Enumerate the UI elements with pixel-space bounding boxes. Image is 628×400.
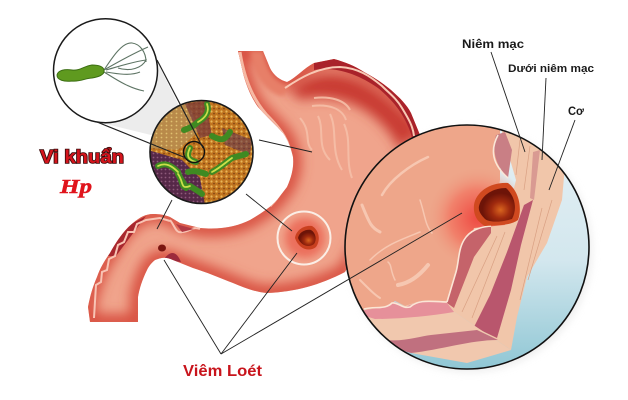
zoomed cross-section circle — [340, 120, 600, 375]
dark lesser curvature band — [267, 116, 282, 132]
esophagus inner tone — [250, 51, 290, 96]
stomach ulcer — [285, 218, 325, 258]
heading: Hp: Hp — [59, 176, 92, 198]
Dưới niêm mạc line — [542, 78, 546, 160]
inflammation glow — [437, 173, 514, 254]
pale tan tissue region — [151, 104, 200, 150]
circle fill and outline — [54, 19, 158, 123]
muscle band horizontal — [385, 330, 498, 353]
greater curvature dark rim — [314, 59, 420, 138]
stomach body — [88, 51, 420, 322]
white edge of mucosa — [447, 135, 508, 302]
duodenum serrated edge — [94, 218, 170, 318]
crater — [474, 183, 520, 226]
cone line upper — [157, 60, 203, 148]
micro view of bacteria in stomach lining — [148, 98, 256, 208]
Viêm Loét to big circle — [221, 213, 462, 354]
white highlight circle around stomach ulcer — [278, 212, 330, 264]
mauve mucosal cut upper — [494, 132, 512, 178]
muscle band vertical — [474, 200, 533, 338]
duodenum right edge fold — [140, 288, 141, 290]
greater curvature light fold — [285, 67, 414, 136]
upper duodenal fold — [170, 220, 200, 232]
duodenal ulcer — [158, 244, 166, 252]
micro circle to duodenum — [157, 200, 172, 229]
micro circle to ulcer — [246, 194, 292, 231]
purple streak upper — [185, 100, 212, 138]
Cơ line — [549, 120, 575, 190]
flagella — [104, 43, 148, 91]
vertical wall layers — [447, 125, 565, 350]
stomach rugae folds — [300, 98, 352, 178]
tissue background — [150, 101, 252, 203]
bacteria group — [158, 104, 246, 194]
label: Dưới niêm mạc: Dưới niêm mạc — [508, 63, 594, 75]
circle soft shadow — [348, 128, 592, 372]
circle contents — [346, 126, 588, 368]
Viêm Loét to duodenum — [164, 260, 221, 354]
purple streak right — [222, 128, 252, 155]
mauve mucosal cut lower — [447, 227, 491, 308]
label: Viêm Loét: Viêm Loét — [183, 363, 263, 380]
white wavy edge — [364, 301, 447, 309]
upper fold dark accent — [176, 224, 194, 232]
pink top band of lower face — [364, 301, 454, 319]
lower duodenal fold — [164, 253, 181, 262]
label: Niêm mạc: Niêm mạc — [462, 39, 525, 51]
micro circle outline — [150, 100, 253, 204]
duodenum dark outer edge — [108, 216, 146, 256]
label: Cơ: Cơ — [568, 106, 585, 118]
infographic: H. pylori stomach ulcer diagram — [38, 18, 594, 376]
lower wall face — [364, 301, 511, 363]
micro circle to stomach — [259, 140, 312, 152]
circle outline — [345, 125, 589, 369]
muscle band upper faint — [530, 150, 540, 200]
surface folds — [360, 157, 432, 298]
heading: Vi khuẩn: Vi khuẩn — [40, 147, 124, 167]
purple tissue lower left — [148, 150, 205, 205]
red blurred rim — [88, 51, 420, 322]
Niêm mạc line — [491, 52, 525, 152]
magnifier cone connecting bacterium circle to micro view — [98, 62, 200, 147]
small selection circle — [184, 142, 204, 162]
Viêm Loét to stomach ulcer — [221, 253, 297, 354]
leader lines — [97, 52, 575, 354]
bacterium enlarged circle — [54, 19, 158, 123]
cone line lower — [97, 122, 186, 158]
inner mucosa surface — [340, 120, 500, 312]
upper fundus deep red shade — [290, 73, 420, 150]
esophagus and lesser curve light wall — [240, 52, 291, 206]
stomach and duodenum — [88, 51, 420, 322]
bacterium body — [57, 65, 104, 81]
wall striations — [462, 140, 552, 318]
